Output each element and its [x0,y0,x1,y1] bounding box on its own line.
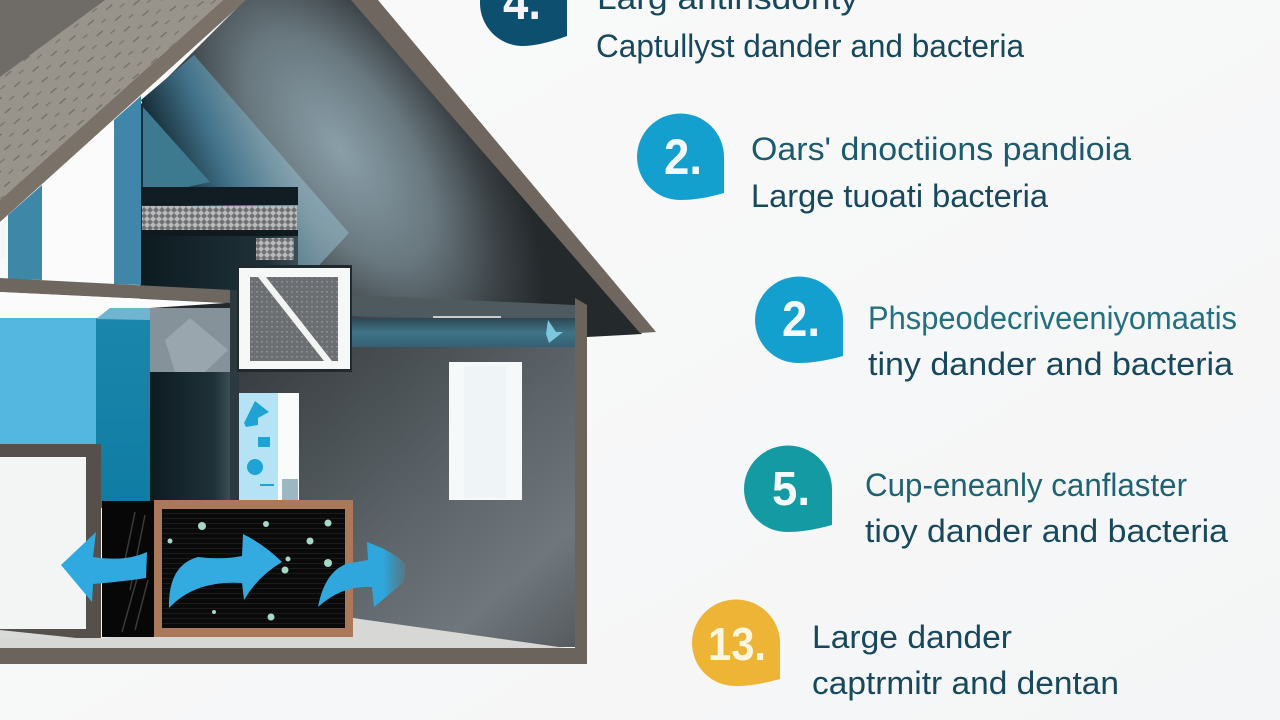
item 4 [744,446,1228,549]
dust particles [168,520,332,620]
floor [0,618,575,650]
ceiling beam left [0,278,232,303]
item 2 description: Large tuoati bacteria [751,178,1048,214]
item 4 heading: Cup-eneanly canflaster [865,467,1187,503]
exterior wall panels [0,96,141,285]
item 4 description: tioy dander and bacteria [865,513,1228,549]
badge 3: 2. [782,291,820,347]
item 3 description: tiny dander and bacteria [868,346,1233,382]
right wall post [575,298,587,664]
left white cabinet [0,444,101,639]
attic interior [140,0,642,345]
item 1 [480,0,1024,64]
arrow: air through filter [169,534,282,608]
mesh filter band [141,187,298,237]
ceiling white strip [0,292,226,320]
item 2 heading: Oars' dnoctiions pandioia [751,131,1131,167]
right roof edge [351,0,656,333]
item 1 description: Captullyst dander and bacteria [596,28,1024,64]
item 5 [692,600,1119,701]
badge 4: 5. [772,463,810,516]
blue room side wall [96,318,150,508]
main filter unit [154,500,353,637]
item 2 [637,114,1131,214]
attic duct [141,55,349,290]
left roof shingles [0,0,223,200]
dark roof shading [0,0,105,77]
badge 3 [755,276,843,363]
badge 5: 13. [708,618,766,670]
vertical duct [141,236,298,296]
badge 1 [480,0,567,46]
left roof edge [0,0,246,222]
house cutaway illustration [0,0,656,664]
wall window [449,362,522,500]
blue room wall [0,318,96,446]
ceiling beam right [350,295,575,320]
horizontal air duct [350,316,575,347]
interior grey wall [230,345,576,647]
ceiling vent filter [237,265,352,372]
arrow: air out left [61,532,147,602]
item 5 description: captrmitr and dentan [812,665,1119,701]
air quality sensor [239,393,299,500]
item 3 [755,276,1237,382]
badge 5 [692,600,780,686]
item 5 heading: Large dander [812,619,1012,655]
dark column [150,372,230,502]
badge 4 [744,446,832,532]
grey panel [150,308,230,373]
badge 2: 2. [664,129,702,185]
badge 2 [637,114,724,200]
side charcoal filter [102,501,154,637]
small mesh block [256,238,294,260]
bottom sill [0,648,587,664]
arrow: clean air out right [318,542,406,607]
item 3 heading: Phspeodecriveeniyomaatis [868,300,1237,336]
